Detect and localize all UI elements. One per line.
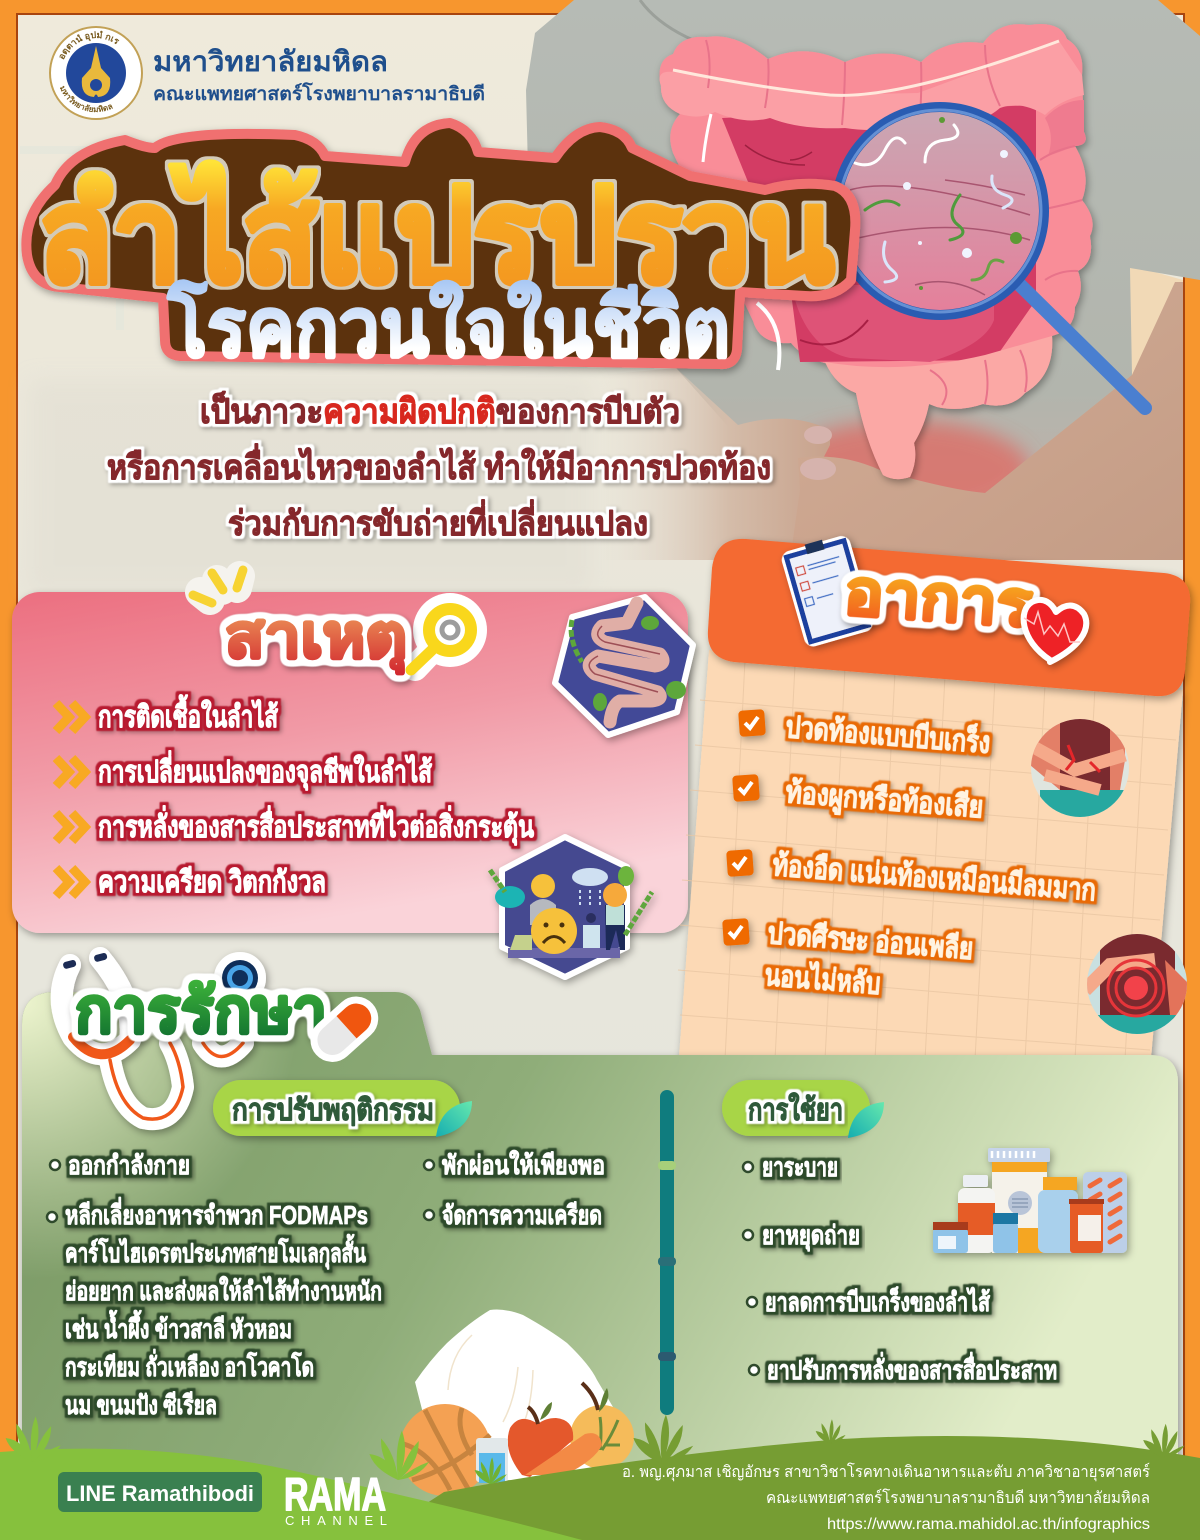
title: ลำไส้แปรปรวน: [38, 162, 834, 309]
list: behaviour column 1: เช่น น้ำผึ้ง ข้าวสาลี หัวหอม: [65, 1309, 292, 1344]
divider with markers: [658, 1090, 676, 1415]
panel: treatment: [22, 952, 1178, 1510]
header band: symptoms: [708, 539, 1190, 696]
list: causes: การติดเชื้อในลำไส้: [98, 694, 279, 734]
illustration: healthy food bag: [399, 1310, 634, 1496]
logo: Mahidol University seal: [49, 26, 143, 120]
icon: stress hexagon: [490, 837, 652, 977]
label: medication: [722, 1080, 884, 1138]
logo: Mahidol University seal: มหาวิทยาลัยมหิดล: [60, 86, 113, 112]
credits: คณะแพทยศาสตร์โรงพยาบาลรามาธิบดี มหาวิทยาลัยมหิดล: [766, 1488, 1150, 1507]
list: symptoms: ปวดศีรษะ อ่อนเพลีย: [766, 917, 974, 966]
description text: หรือการเคลื่อนไหวของลำไส้ ทำให้มีอาการปวดท้อง: [107, 443, 771, 487]
heading: symptoms: อาการ: [842, 558, 1034, 640]
list: medication: ยาหยุดถ่าย: [762, 1220, 860, 1252]
heading: university name: คณะแพทยศาสตร์โรงพยาบาลรามาธิบดี: [153, 82, 485, 105]
icon: pill: [311, 997, 377, 1061]
list: behaviour column 1: กระเทียม ถั่วเหลือง อาโวคาโด: [65, 1348, 314, 1382]
list: symptoms: ปวดท้องแบบบีบเกร็ง: [784, 708, 992, 760]
illustration: large intestine with magnifier: [660, 24, 1093, 479]
logo: LINE Ramathibodi badge: LINE Ramathibodi: [66, 1481, 254, 1506]
list: behaviour column 1: คาร์โบไฮเดรตประเภทสายโมเลกุลสั้น: [65, 1233, 366, 1270]
title: [26, 123, 855, 374]
list: causes: การหลั่งของสารสื่อประสาทที่ไวต่อสิ่งกระตุ้น: [98, 805, 534, 846]
list: medication: ยาระบาย: [762, 1152, 838, 1182]
heading: university name: [153, 46, 485, 105]
list: behaviour column 1: ย่อยยาก และส่งผลให้ลำไส้ทำงานหนัก: [65, 1275, 382, 1306]
list: behaviour column 1: [47, 1150, 382, 1420]
heading: causes: [193, 570, 487, 674]
list: medication: [743, 1152, 1057, 1385]
list: symptoms: ท้องผูกหรือท้องเสีย: [784, 776, 984, 827]
footer hills: [0, 1415, 1200, 1540]
list: medication: ยาลดการบีบเกร็งของลำไส้: [765, 1286, 990, 1317]
list: behaviour column 1: หลีกเลี่ยงอาหารจำพวก FODMAPs: [65, 1196, 368, 1230]
logo: Mahidol University seal: อตฺตานํ อุปมํ กเร: [60, 30, 120, 60]
credits: [622, 1462, 1150, 1533]
list: behaviour column 1: นม ขนมปัง ซีเรียล: [65, 1390, 217, 1420]
label: behaviour change: การปรับพฤติกรรม: [232, 1094, 434, 1127]
logo: LINE Ramathibodi badge: [58, 1472, 262, 1512]
icon: intestine hexagon: [555, 597, 693, 735]
heading: university name: มหาวิทยาลัยมหิดล: [153, 46, 388, 77]
photo: person holding abdomen: [526, 0, 1200, 560]
icon: cramp illustration: [1030, 718, 1129, 820]
list: causes: ความเครียด วิตกกังวล: [98, 866, 326, 899]
icon: heart with pulse: [1024, 600, 1086, 662]
list: behaviour column 2: [424, 1150, 605, 1230]
description text: ร่วมกับการขับถ่ายที่เปลี่ยนแปลง: [228, 499, 648, 543]
logo: RAMA Channel: RAMA: [284, 1468, 386, 1520]
logo: RAMA Channel: CHANNEL: [285, 1513, 387, 1528]
list: causes: การเปลี่ยนแปลงของจุลชีพในลำไส้: [98, 750, 433, 791]
heading: causes: สาเหตุ: [225, 603, 407, 674]
panel: causes: [12, 570, 693, 977]
list: symptoms: [722, 708, 1097, 1001]
list: symptoms: นอนไม่หลับ: [763, 957, 882, 1001]
description text: เป็นภาวะความผิดปกติของการบีบตัว: [200, 390, 680, 431]
panel: symptoms: [678, 534, 1190, 1070]
logo: RAMA Channel: [284, 1468, 387, 1528]
icon: medicine bottles: [933, 1148, 1127, 1253]
label: behaviour change: [213, 1080, 472, 1137]
icon: abdominal pain illustration: [1087, 934, 1187, 1034]
magnifying glass over intestine: [836, 107, 1145, 408]
title: โรคกวนใจในชีวิต: [167, 281, 730, 374]
list: medication: ยาปรับการหลั่งของสารสื่อประสาท: [767, 1351, 1057, 1385]
list: behaviour column 2: จัดการความเครียด: [442, 1200, 602, 1230]
list: symptoms: ท้องอืด แน่นท้องเหมือนมีลมมาก: [771, 849, 1097, 907]
list: behaviour column 2: พักผ่อนให้เพียงพอ: [442, 1150, 605, 1180]
list: causes: [56, 694, 534, 899]
credits: https://www.rama.mahidol.ac.th/infographics: [827, 1516, 1150, 1533]
list: behaviour column 1: ออกกำลังกาย: [68, 1150, 190, 1180]
credits: อ. พญ.ศุภมาส เชิญอักษร สาขาวิชาโรคทางเดินอาหารและตับ ภาควิชาอายุรศาสตร์: [622, 1462, 1150, 1482]
heading: treatment: การรักษา: [75, 977, 327, 1046]
icon: stethoscope: [62, 952, 260, 1119]
label: medication: การใช้ยา: [748, 1092, 843, 1127]
icon: clipboard: [783, 534, 870, 643]
description text: [107, 390, 771, 543]
